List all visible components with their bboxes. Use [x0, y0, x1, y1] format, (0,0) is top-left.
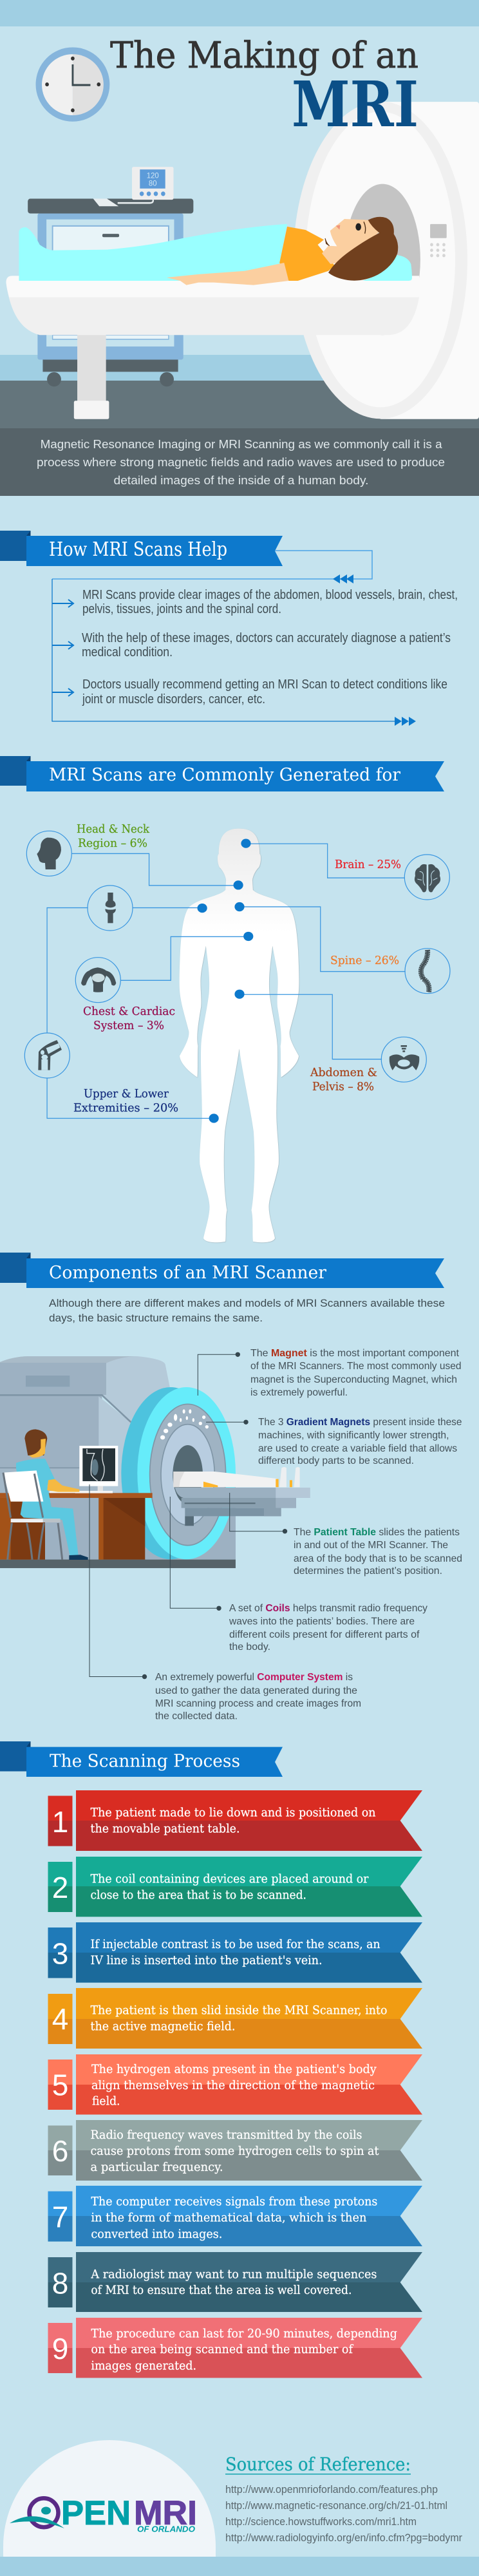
callout: computer system: An extremely powerful Computer System is [155, 1672, 353, 1683]
step 8: A radiologist may want to run multiple sequences [90, 2267, 377, 2281]
intro text band [0, 428, 479, 496]
logo panel: Open MRI of Orlando: OF ORLANDO [137, 2524, 195, 2534]
sources of reference: http://www.openmrioforlando.com/features.php [225, 2483, 438, 2496]
label: chest and cardiac [83, 1005, 175, 1032]
hero illustration: patient entering MRI scanner: 120 [147, 171, 159, 180]
step 5: The hydrogen atoms present in the patient's body [91, 2062, 377, 2076]
label: brain: Brain – 25% [335, 858, 401, 871]
step 8: 8 [52, 2266, 68, 2300]
intro text band: process where strong magnetic fields and radio waves are used to produce [37, 456, 445, 469]
label: abdomen and pelvis [310, 1066, 377, 1094]
operator [24, 1429, 47, 1455]
patient head [322, 217, 412, 281]
callout: gradient magnets: machines, with significantly lower strength, [258, 1430, 449, 1441]
sources of reference: http://www.radiologyinfo.org/en/info.cfm?pg=bodymr [225, 2532, 462, 2544]
step 5 [48, 2054, 422, 2115]
icon: joint [88, 886, 133, 931]
step 7: 7 [52, 2201, 68, 2234]
hero illustration: patient entering MRI scanner: 80 [149, 178, 157, 188]
callout: coils [170, 1497, 427, 1653]
step 4: the active magnetic field. [90, 2019, 236, 2033]
sources of reference: Sources of Reference: [225, 2454, 411, 2475]
label: chest and cardiac: Chest & Cardiac [83, 1005, 175, 1018]
heading: The Scanning Process: The Scanning Process [50, 1751, 240, 1771]
heading: The Scanning Process [0, 1741, 283, 1777]
title: The Making of an [110, 35, 418, 77]
connector lines [47, 844, 406, 1118]
bullet text: pelvis, tissues, joints and the spinal cord. [82, 602, 281, 616]
callout: gradient magnets: different body parts to be scanned. [258, 1455, 414, 1466]
panel: how MRI scans help [52, 551, 458, 726]
step 1: The patient made to lie down and is positioned on [90, 1806, 376, 1820]
callout: coils: different coils present for different parts of [229, 1629, 420, 1640]
step 1 [48, 1790, 422, 1851]
components intro text: Although there are different makes and models of MRI Scanners available these [49, 1297, 445, 1309]
components intro text [49, 1297, 445, 1324]
step 4: The patient is then slid inside the MRI Scanner, into [90, 2003, 388, 2017]
callout: computer system: the collected data. [155, 1710, 238, 1722]
logo panel: Open MRI of Orlando: MRI [134, 2494, 197, 2532]
callout: patient table: The Patient Table slides the patients [294, 1527, 460, 1538]
logo panel: Open MRI of Orlando: PEN [61, 2494, 131, 2532]
callout: coils: waves into the patients’ bodies. There are [229, 1616, 415, 1627]
callout: magnet: The Magnet is the most important component [250, 1348, 460, 1359]
label: abdomen and pelvis: Abdomen & [310, 1066, 377, 1079]
step 1: 1 [52, 1805, 68, 1839]
sources of reference: http://science.howstuffworks.com/mri1.htm [225, 2515, 417, 2528]
step 3: IV line is inserted into the patient's vein. [90, 1953, 322, 1967]
label: extremities: Extremities – 20% [73, 1101, 178, 1115]
label: head and neck [77, 822, 150, 850]
callout: magnet: of the MRI Scanners. The most commonly used [250, 1361, 461, 1372]
step 9 [48, 2318, 422, 2378]
callout: computer system: MRI scanning process and create images from [155, 1698, 361, 1709]
arrow: triple left [333, 574, 353, 583]
label: extremities [73, 1087, 178, 1115]
sources of reference [225, 2454, 462, 2544]
heading: MRI Scans are Commonly Generated for: MRI Scans are Commonly Generated for [49, 765, 400, 785]
callout: computer system [89, 1484, 361, 1722]
step 7: converted into images. [91, 2227, 222, 2241]
callout: patient table: in and out of the MRI Scanner. The [294, 1540, 448, 1551]
bullet text [82, 588, 458, 706]
step 2: 2 [52, 1871, 68, 1904]
callout: computer system: used to gather the data generated during the [155, 1685, 357, 1696]
title: MRI [292, 68, 418, 141]
step 1: the movable patient table. [90, 1822, 240, 1836]
callout: coils: the body. [229, 1642, 270, 1653]
illustration: MRI scanner and operator [0, 1356, 310, 1568]
step 6: Radio frequency waves transmitted by the coils [90, 2128, 362, 2142]
chair [3, 1470, 43, 1502]
callout: magnet: is extremely powerful. [250, 1387, 348, 1398]
step 6: 6 [52, 2134, 68, 2168]
step 2: The coil containing devices are placed around or [90, 1872, 369, 1886]
body silhouette [180, 829, 299, 1242]
step 7: in the form of mathematical data, which is then [91, 2210, 366, 2224]
step 3 [48, 1922, 422, 1983]
callout: patient table: area of the body that is to be scanned [294, 1553, 462, 1564]
step 6 [48, 2120, 422, 2181]
label: spine: Spine – 26% [330, 954, 399, 967]
callout: patient table: determines the patient’s position. [294, 1566, 442, 1577]
step 5: align themselves in the direction of the magnetic [91, 2078, 375, 2092]
step 4 [48, 1988, 422, 2049]
label: abdomen and pelvis: Pelvis – 8% [312, 1080, 374, 1094]
label: chest and cardiac: System – 3% [93, 1019, 164, 1032]
icon: brain [404, 855, 449, 900]
intro text band: Magnetic Resonance Imaging or MRI Scanning as we commonly call it is a [41, 438, 443, 451]
monitor [79, 1446, 118, 1486]
step 6: cause protons from some hydrogen cells to spin at [90, 2144, 379, 2158]
icon: chest [75, 958, 120, 1003]
icon: spine [405, 949, 450, 994]
icon: head and neck [26, 831, 71, 876]
hero illustration: patient entering MRI scanner [0, 0, 479, 428]
step 4: 4 [52, 2002, 68, 2036]
step 8: of MRI to ensure that the area is well covered. [91, 2283, 352, 2297]
intro text band: detailed images of the inside of a human body. [113, 474, 368, 487]
arrow: triple right [395, 717, 416, 726]
title [110, 35, 418, 141]
bullet text: medical condition. [82, 645, 173, 659]
logo panel: Open MRI of Orlando [3, 2440, 216, 2557]
label: head and neck: Head & Neck [77, 822, 150, 836]
step 5: 5 [52, 2069, 68, 2102]
label: head and neck: Region – 6% [78, 837, 147, 850]
body diagram [47, 829, 406, 1242]
label: extremities: Upper & Lower [84, 1087, 169, 1101]
step 6: a particular frequency. [90, 2160, 223, 2174]
step 2: close to the area that is to be scanned. [90, 1888, 306, 1902]
callout: coils: A set of Coils helps transmit radio frequency [229, 1603, 427, 1614]
step 7: The computer receives signals from these protons [91, 2195, 377, 2209]
icon: knee [24, 1033, 70, 1078]
footer band [0, 2557, 479, 2576]
step 9: images generated. [91, 2358, 196, 2372]
bullet text: joint or muscle disorders, cancer, etc. [82, 692, 265, 706]
step 3: If injectable contrast is to be used for the scans, an [90, 1937, 380, 1951]
heading: Components of an MRI Scanner [0, 1253, 444, 1288]
step 9: on the area being scanned and the number of [91, 2342, 354, 2356]
desk [0, 1493, 153, 1498]
marker dots [198, 838, 253, 1123]
bullet arrows [52, 600, 73, 696]
callout: gradient magnets: are used to create a variable field that allows [258, 1443, 457, 1454]
callout: gradient magnets [206, 1417, 462, 1466]
callout: gradient magnets: The 3 Gradient Magnets present inside these [258, 1417, 462, 1428]
step 7 [48, 2186, 422, 2246]
callout: magnet: magnet is the Superconducting Magnet, which [250, 1374, 457, 1385]
heading: How MRI Scans Help: How MRI Scans Help [49, 538, 227, 561]
step 9: The procedure can last for 20-90 minutes, depending [91, 2326, 397, 2340]
step 3: 3 [52, 1937, 68, 1971]
sources of reference: http://www.magnetic-resonance.org/ch/21-01.html [225, 2499, 447, 2512]
step 9: 9 [52, 2332, 68, 2365]
step 2 [48, 1857, 422, 1917]
heading: How MRI Scans Help [0, 531, 283, 566]
step 8 [48, 2252, 422, 2312]
callout: patient table [230, 1493, 462, 1577]
heading: MRI Scans are Commonly Generated for [0, 756, 444, 791]
step 5: field. [92, 2094, 120, 2108]
components intro text: days, the basic structure remains the same. [49, 1312, 263, 1324]
patient on table [173, 1472, 277, 1487]
icon: abdomen and pelvis [381, 1037, 426, 1082]
heading: Components of an MRI Scanner: Components of an MRI Scanner [49, 1263, 326, 1283]
callout: magnet [198, 1348, 461, 1398]
